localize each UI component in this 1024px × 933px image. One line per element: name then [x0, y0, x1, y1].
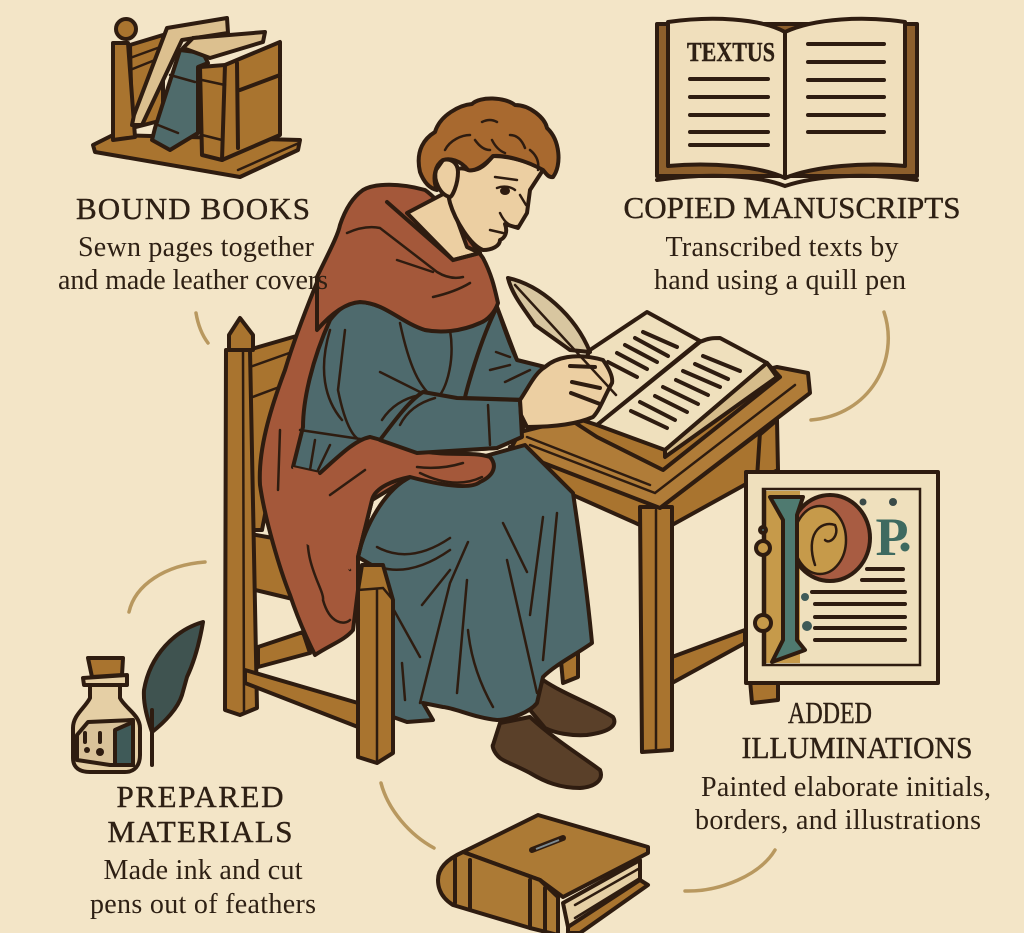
text: prepared materials description: Made ink and cut — [104, 855, 303, 886]
lap cloth — [293, 437, 494, 570]
heading: added illuminations: ADDED — [788, 695, 872, 730]
icon: open manuscript — [657, 19, 917, 186]
table — [510, 367, 810, 752]
text: copied manuscripts description — [654, 232, 906, 296]
icon: closed book — [438, 815, 648, 933]
face — [447, 156, 543, 250]
icon: bound books on shelf — [93, 18, 300, 177]
text: copied manuscripts description: hand using a quill pen — [654, 265, 906, 296]
text: copied manuscripts description: Transcribed texts by — [666, 232, 898, 263]
quill — [508, 278, 590, 352]
heading: prepared materials — [108, 779, 292, 849]
text: prepared materials description: pens out of feathers — [90, 889, 316, 920]
robe skirt — [358, 445, 592, 722]
far stool leg — [560, 650, 578, 683]
ear — [435, 160, 458, 197]
heading: prepared materials: MATERIALS — [108, 814, 292, 849]
near foot — [493, 717, 601, 788]
icon: illuminated initial page: P — [876, 507, 908, 567]
hand — [520, 356, 612, 427]
facial features — [490, 177, 526, 233]
heading: prepared materials: PREPARED — [116, 779, 284, 814]
cape hood — [317, 185, 498, 332]
text: bound books description — [58, 232, 328, 296]
text: bound books description: Sewn pages together — [78, 232, 315, 263]
text: added illuminations description — [695, 772, 991, 836]
heading: copied manuscripts: COPIED MANUSCRIPTS — [624, 190, 960, 225]
icon: open manuscript: TEXTUS — [687, 37, 775, 67]
red cloak back — [260, 213, 410, 655]
letter P stem — [770, 497, 805, 662]
text: added illuminations description: Painted elaborate initials, — [701, 772, 991, 803]
heading: added illuminations: ILLUMINATIONS — [742, 730, 972, 765]
chair front leg — [358, 565, 393, 763]
far foot — [530, 680, 614, 735]
connector arcs — [129, 312, 888, 891]
heading: bound books: BOUND BOOKS — [76, 191, 310, 226]
open book on table — [560, 312, 780, 470]
text: prepared materials description — [90, 855, 316, 920]
sleeve — [380, 392, 522, 453]
chair — [225, 318, 358, 727]
letter P bowl — [790, 495, 870, 581]
hair — [419, 98, 559, 190]
forearm — [465, 307, 545, 400]
text: bound books description: and made leather covers — [58, 265, 328, 296]
icon: ink bottle and feather — [73, 622, 203, 772]
monk figure — [260, 98, 616, 788]
blue torso — [293, 302, 543, 473]
heading: added illuminations — [742, 695, 972, 765]
text: added illuminations description: borders, and illustrations — [695, 805, 981, 836]
icon: illuminated initial page — [746, 472, 938, 683]
neck — [407, 192, 480, 260]
